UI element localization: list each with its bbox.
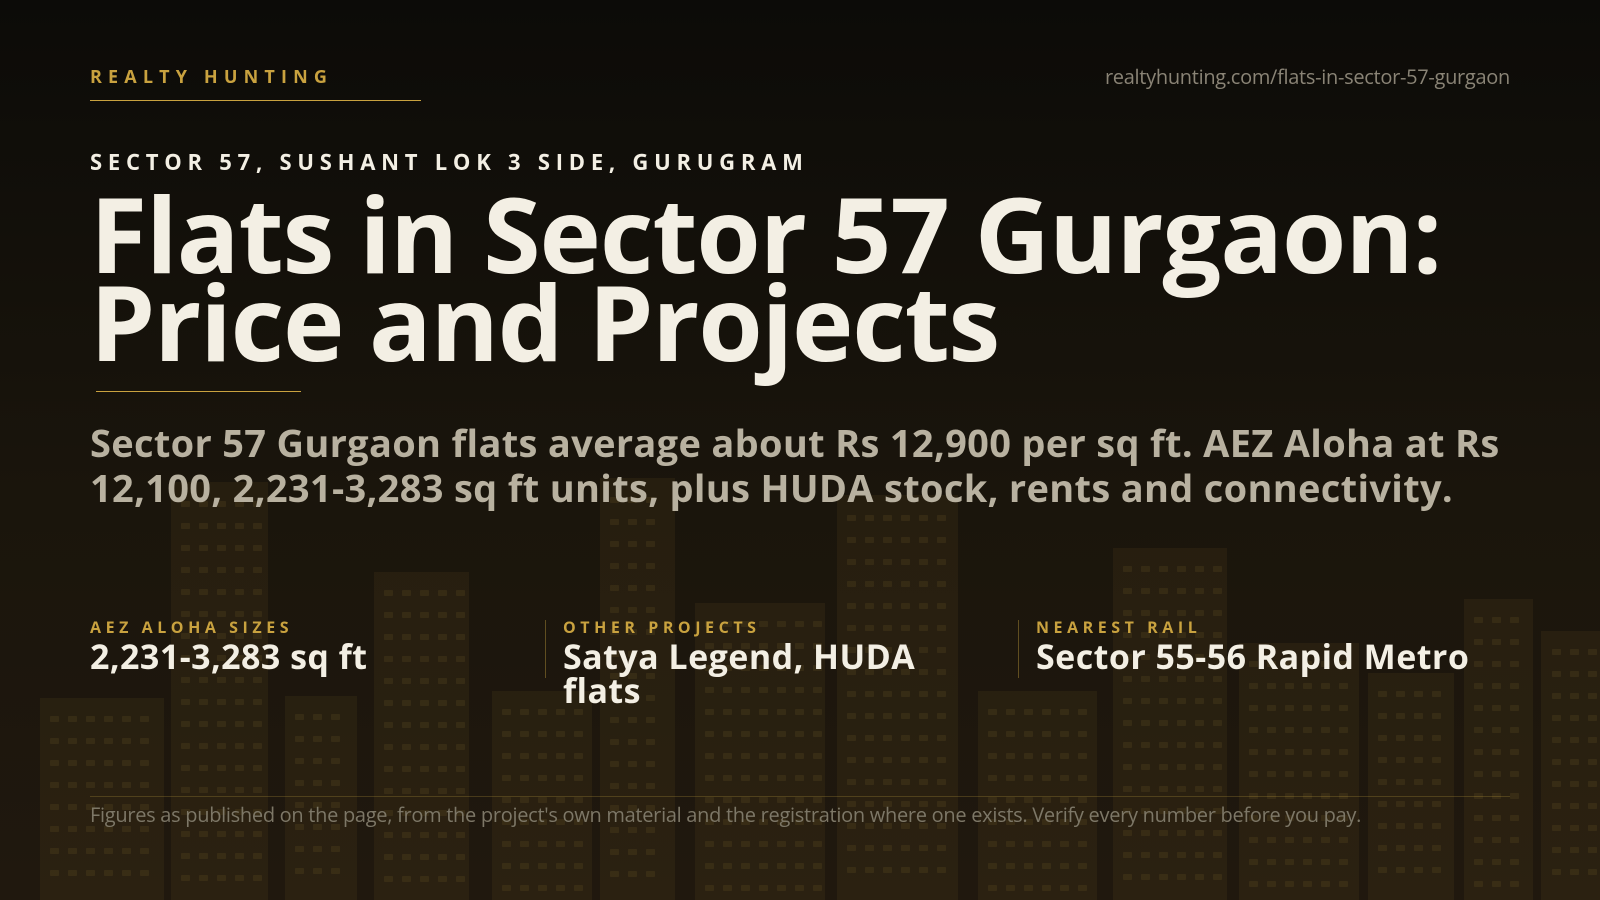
brand underline xyxy=(90,100,421,101)
summary text: Sector 57 Gurgaon flats average about Rs 12,900 per sq ft. AEZ Aloha at Rs xyxy=(90,417,1500,469)
summary text: 12,100, 2,231-3,283 sq ft units, plus HUDA stock, rents and connectivity. xyxy=(90,462,1453,514)
title rule xyxy=(96,391,301,392)
summary text xyxy=(90,417,1500,514)
brand name: REALTY HUNTING xyxy=(90,65,333,89)
title: Price and Projects xyxy=(90,251,999,392)
stat: AEZ Aloha sizes: 2,231-3,283 sq ft xyxy=(90,633,368,679)
stat: other projects xyxy=(545,616,915,713)
stat: other projects: OTHER PROJECTS xyxy=(563,616,760,638)
stat: other projects: flats xyxy=(563,667,641,713)
title xyxy=(90,163,1441,392)
title: Flats in Sector 57 Gurgaon: xyxy=(90,163,1441,304)
stat: other projects: Satya Legend, HUDA xyxy=(563,633,915,679)
footer rule xyxy=(90,796,1510,797)
stat: nearest rail: NEAREST RAIL xyxy=(1036,616,1201,638)
source url: realtyhunting.com/flats-in-sector-57-gurgaon xyxy=(1105,63,1510,90)
stat: AEZ Aloha sizes: AEZ ALOHA SIZES xyxy=(90,616,293,638)
eyebrow location: SECTOR 57, SUSHANT LOK 3 SIDE, GURUGRAM xyxy=(90,147,809,177)
stat: nearest rail: Sector 55-56 Rapid Metro xyxy=(1036,633,1469,679)
footer note: Figures as published on the page, from the project's own material and the registration where one exists. Verify every number before you pay. xyxy=(90,801,1361,828)
